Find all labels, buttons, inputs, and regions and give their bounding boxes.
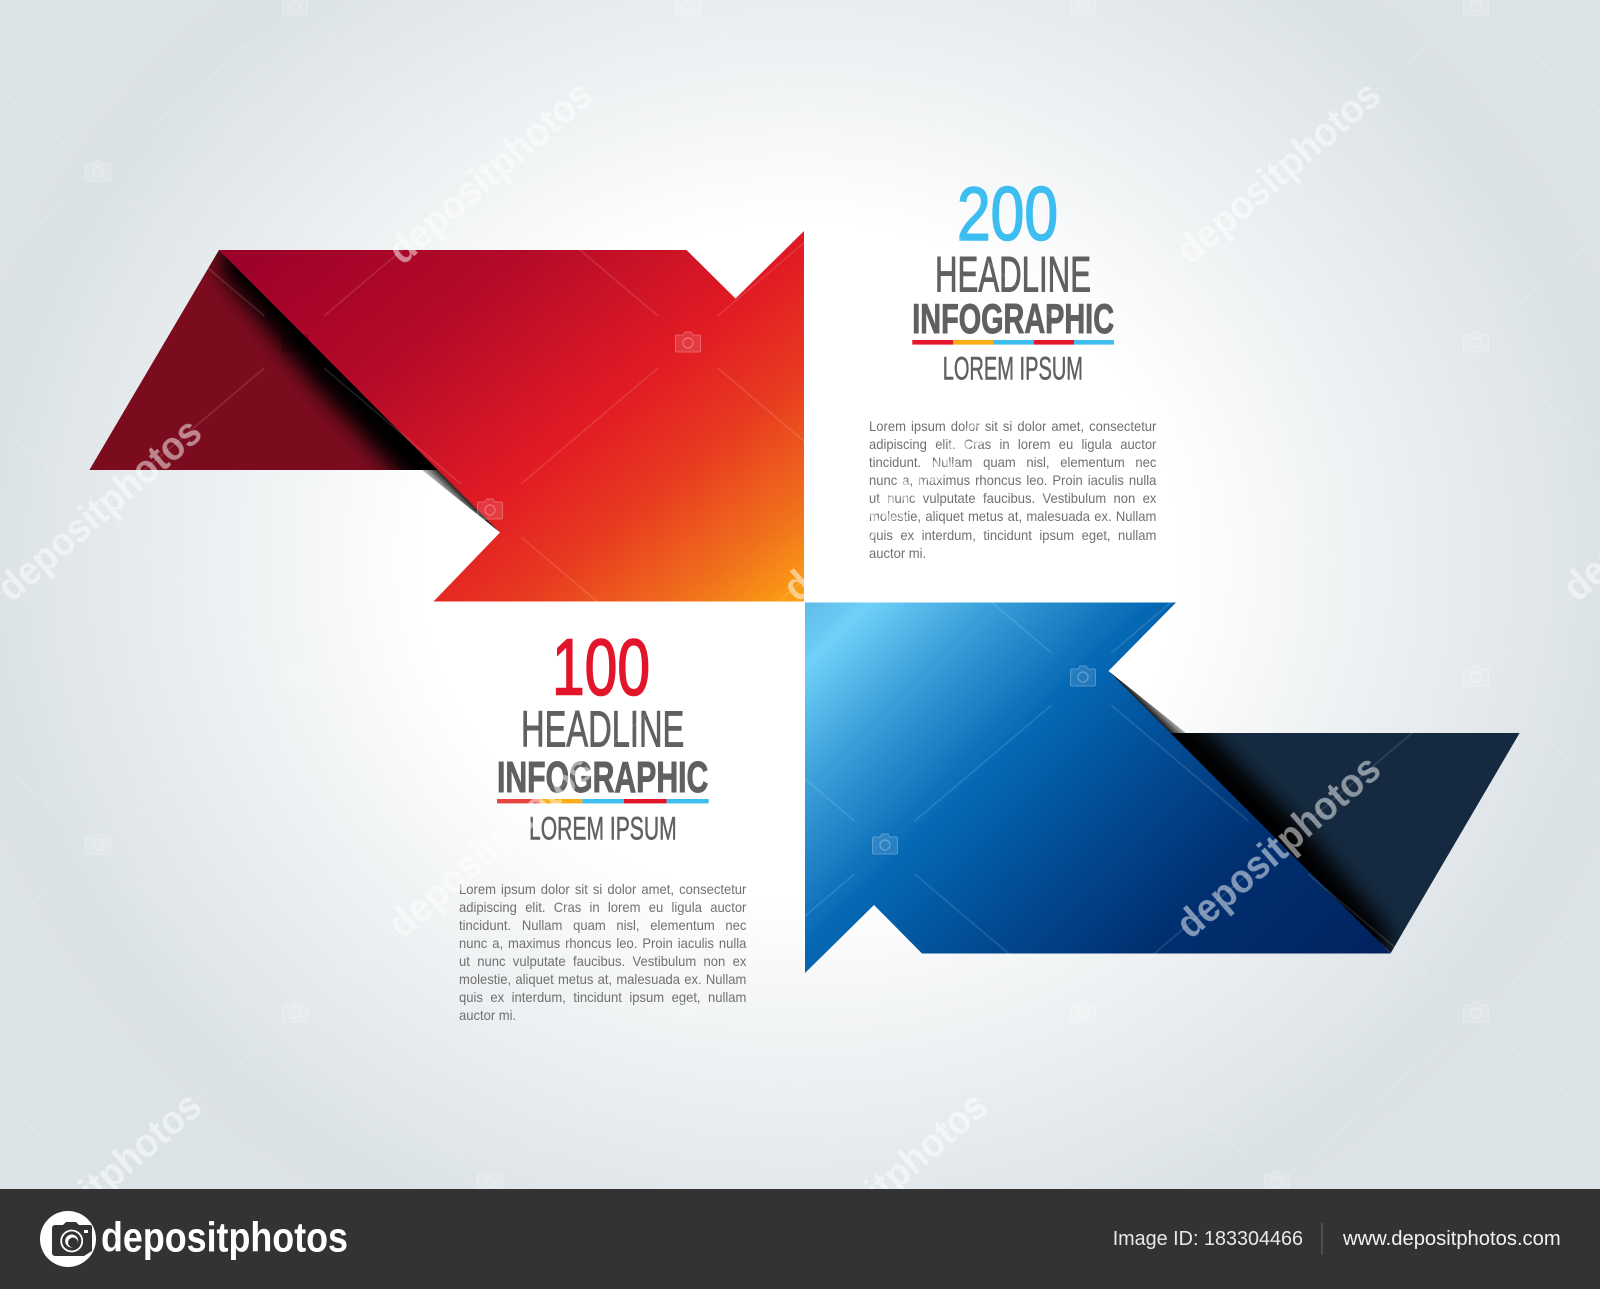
- body text: lower paragraph: ut nunc vulputate faucibus. Vestibulum non ex: [459, 954, 747, 969]
- navy folded triangle: [1168, 733, 1520, 953]
- shadow under red fold: [208, 250, 438, 470]
- panel: red folded arrow shape: [89, 231, 804, 602]
- logo wordmark: depositphotos: [101, 1214, 348, 1261]
- body text: upper paragraph: auctor mi.: [869, 546, 926, 561]
- infographic: INFOGRAPHIC: [497, 753, 708, 802]
- body text: lower paragraph: tincidunt. Nullam quam nisl, elementum nec: [459, 918, 747, 933]
- headline: HEADLINE: [521, 701, 684, 758]
- shadow wedge on background: [422, 470, 500, 532]
- image id: Image ID: 183304466: [1113, 1228, 1303, 1250]
- body text: lower paragraph: auctor mi.: [459, 1008, 516, 1023]
- body text: lower paragraph: Lorem ipsum dolor sit si dolor amet, consectetur: [459, 882, 747, 896]
- watermark text: depositphotos: [380, 746, 601, 947]
- body text: upper paragraph: [869, 419, 1157, 561]
- light to dark blue main shape: [805, 602, 1391, 973]
- body text: upper paragraph: quis ex interdum, tincidunt ipsum eget, nullam: [869, 528, 1157, 543]
- watermark text: depositphotos: [775, 409, 996, 610]
- red to orange main shape: [219, 231, 804, 602]
- watermark text: depositphotos: [1168, 746, 1389, 947]
- body text: upper paragraph: molestie, aliquet metus at, malesuada ex. Nullam: [869, 509, 1157, 524]
- headline: HEADLINE: [935, 247, 1091, 303]
- footer bar: [0, 1189, 1600, 1289]
- body text: lower paragraph: nunc a, maximus rhoncus leo. Proin iaculis nulla: [459, 936, 747, 951]
- icon: depositphotos camera logo: [40, 1211, 96, 1267]
- shadow wedge on background: [1108, 671, 1186, 733]
- body text: lower paragraph: molestie, aliquet metus at, malesuada ex. Nullam: [459, 972, 747, 987]
- infographic: INFOGRAPHIC: [912, 295, 1114, 342]
- watermark text: depositphotos: [1168, 72, 1389, 273]
- watermark text: depositphotos: [775, 1083, 996, 1284]
- text block: 200 heading: [912, 172, 1114, 386]
- panel: blue folded arrow shape: [805, 602, 1520, 973]
- body text: upper paragraph: nunc a, maximus rhoncus leo. Proin iaculis nulla: [869, 473, 1157, 488]
- watermark text: depositphotos: [380, 72, 601, 273]
- number 100: 100: [552, 622, 650, 712]
- dark red folded triangle: [89, 250, 440, 470]
- website url: www.depositphotos.com: [1342, 1228, 1561, 1250]
- body text: lower paragraph: quis ex interdum, tincidunt ipsum eget, nullam: [459, 990, 747, 1005]
- text block: 100 heading: [497, 622, 709, 846]
- body text: upper paragraph: tincidunt. Nullam quam nisl, elementum nec: [869, 455, 1157, 470]
- body text: upper paragraph: Lorem ipsum dolor sit si dolor amet, consectetur: [869, 419, 1157, 434]
- divider: [1322, 1223, 1323, 1255]
- colour bar: [912, 340, 1114, 345]
- number 200: 200: [957, 172, 1058, 257]
- colour bar: [497, 799, 709, 803]
- shadow under blue fold: [1170, 733, 1404, 954]
- body text: upper paragraph: ut nunc vulputate faucibus. Vestibulum non ex: [869, 491, 1157, 506]
- lorem ipsum: LOREM IPSUM: [943, 350, 1083, 386]
- body text: lower paragraph: adipiscing elit. Cras in lorem eu ligula auctor: [459, 900, 747, 915]
- body text: upper paragraph: adipiscing elit. Cras in lorem eu ligula auctor: [869, 437, 1157, 452]
- body text: lower paragraph: [459, 882, 747, 1023]
- lorem ipsum: LOREM IPSUM: [529, 810, 677, 846]
